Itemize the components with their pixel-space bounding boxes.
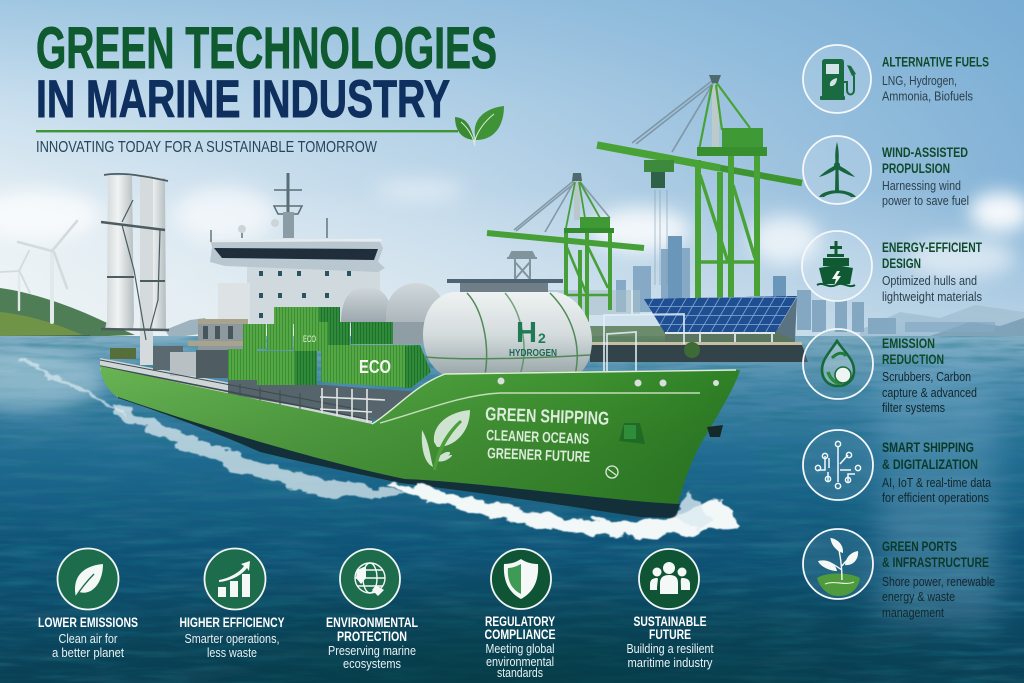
item: emission reduction: capture & advanced	[882, 386, 977, 400]
benefit: regulatory compliance: COMPLIANCE	[484, 627, 556, 642]
rotor sails	[101, 174, 169, 365]
container stacks: ECO	[359, 357, 391, 377]
title line two: IN MARINE INDUSTRY	[36, 70, 450, 129]
bottom row: benefits	[38, 548, 714, 680]
hydrogen tank: 2	[538, 330, 546, 346]
ship superstructure	[188, 173, 385, 350]
hull slogan: GREENER FUTURE	[487, 445, 590, 466]
item: energy-efficient design: DESIGN	[882, 256, 921, 271]
item: alternative fuels: LNG, Hydrogen,	[882, 74, 957, 88]
item: green ports and infrastructure	[803, 529, 995, 620]
item: alternative fuels: Ammonia, Biofuels	[882, 90, 973, 104]
title block	[36, 16, 504, 156]
item: green ports and infrastructure: GREEN PORTS	[882, 539, 957, 554]
item: energy-efficient design: lightweight materials	[882, 290, 982, 304]
item: wind-assisted propulsion: PROPULSION	[882, 161, 950, 176]
hydrogen tank: H	[516, 317, 537, 349]
item: emission reduction: filter systems	[882, 401, 945, 415]
pier	[590, 326, 808, 362]
item: smart shipping and digitalization: & DIGITALIZATION	[882, 457, 978, 472]
soft glow behind right column	[878, 340, 998, 620]
small grey tower	[507, 252, 537, 279]
benefit: environmental protection	[326, 549, 418, 671]
hull slogan: CLEANER OCEANS	[486, 427, 589, 448]
item: energy-efficient design: Optimized hulls and	[882, 274, 977, 288]
benefit: lower emissions: LOWER EMISSIONS	[38, 615, 138, 630]
sea	[0, 336, 1024, 683]
benefit: regulatory compliance: Meeting global	[486, 642, 554, 656]
benefit: higher efficiency: Smarter operations,	[184, 632, 280, 646]
item: alternative fuels	[803, 45, 989, 113]
item: wind-assisted propulsion: Harnessing wind	[882, 179, 961, 193]
hull slogan: GREEN SHIPPING	[485, 403, 610, 429]
ship deck equipment and rail	[100, 346, 420, 428]
ship hull	[100, 366, 740, 518]
benefit: higher efficiency: less waste	[207, 646, 257, 660]
bow foam wake	[388, 482, 737, 536]
benefit: sustainable future: SUSTAINABLE	[634, 614, 706, 629]
benefit: regulatory compliance: standards	[497, 666, 543, 680]
crane: small green	[487, 173, 644, 322]
spherical tanks	[341, 283, 444, 344]
subtitle: INNOVATING TODAY FOR A SUSTAINABLE TOMORROW	[36, 139, 378, 156]
benefit: lower emissions	[38, 548, 138, 660]
item: wind-assisted propulsion	[803, 136, 969, 208]
item: green ports and infrastructure: & INFRASTRUCTURE	[882, 555, 989, 570]
benefit: lower emissions: a better planet	[52, 646, 124, 660]
sky background	[0, 0, 1024, 345]
item: wind-assisted propulsion: power to save fuel	[882, 194, 969, 208]
item: green ports and infrastructure: management	[882, 606, 944, 620]
item: emission reduction: REDUCTION	[882, 352, 944, 367]
crane: large green	[597, 75, 802, 298]
skyline	[540, 236, 995, 334]
benefit: regulatory compliance: environmental	[486, 655, 554, 669]
item: smart shipping and digitalization: SMART SHIPPING	[882, 440, 974, 455]
item: energy-efficient design: ENERGY-EFFICIENT	[882, 240, 983, 255]
benefit: environmental protection: ecosystems	[343, 657, 401, 671]
container stacks: ECO	[303, 334, 316, 345]
hull leaf logo	[422, 410, 470, 470]
benefit: higher efficiency: HIGHER EFFICIENCY	[180, 615, 284, 630]
item: wind-assisted propulsion: WIND-ASSISTED	[882, 145, 968, 160]
item: green ports and infrastructure: energy & waste	[882, 590, 955, 604]
container stacks	[228, 307, 431, 388]
benefit: higher efficiency	[180, 548, 284, 660]
benefit: sustainable future	[626, 549, 714, 670]
benefit: sustainable future: Building a resilient	[626, 642, 714, 656]
benefit: lower emissions: Clean air for	[58, 632, 118, 646]
benefit: regulatory compliance	[484, 549, 556, 680]
item: energy-efficient design	[802, 231, 983, 304]
benefit: sustainable future: FUTURE	[649, 627, 691, 642]
wake behind ship	[20, 358, 405, 498]
right panel: technologies	[802, 45, 995, 620]
item: smart shipping and digitalization: AI, IoT & real-time data	[882, 476, 991, 490]
item: alternative fuels: ALTERNATIVE FUELS	[882, 54, 989, 70]
title rule	[36, 130, 458, 132]
benefit: environmental protection: Preserving marine	[328, 644, 416, 658]
title line one: GREEN TECHNOLOGIES	[36, 16, 497, 81]
shore power conduits	[604, 290, 684, 372]
item: emission reduction	[803, 329, 977, 415]
benefit: regulatory compliance: REGULATORY	[485, 614, 555, 629]
item: smart shipping and digitalization	[803, 430, 991, 505]
hydrogen tank: HYDROGEN	[509, 347, 557, 359]
distant hills	[0, 288, 1024, 341]
solar panels	[644, 296, 797, 342]
benefit: sustainable future: maritime industry	[628, 656, 713, 670]
item: smart shipping and digitalization: for efficient operations	[882, 491, 989, 505]
hull slogan	[485, 403, 618, 478]
item: emission reduction: EMISSION	[882, 336, 935, 351]
item: emission reduction: Scrubbers, Carbon	[882, 370, 971, 384]
wind turbines	[0, 221, 77, 322]
benefit: environmental protection: PROTECTION	[337, 629, 407, 644]
item: green ports and infrastructure: Shore power, renewable	[882, 575, 995, 589]
hydrogen tank	[423, 279, 592, 376]
icon: leaves	[455, 106, 504, 146]
benefit: environmental protection: ENVIRONMENTAL	[326, 615, 418, 630]
